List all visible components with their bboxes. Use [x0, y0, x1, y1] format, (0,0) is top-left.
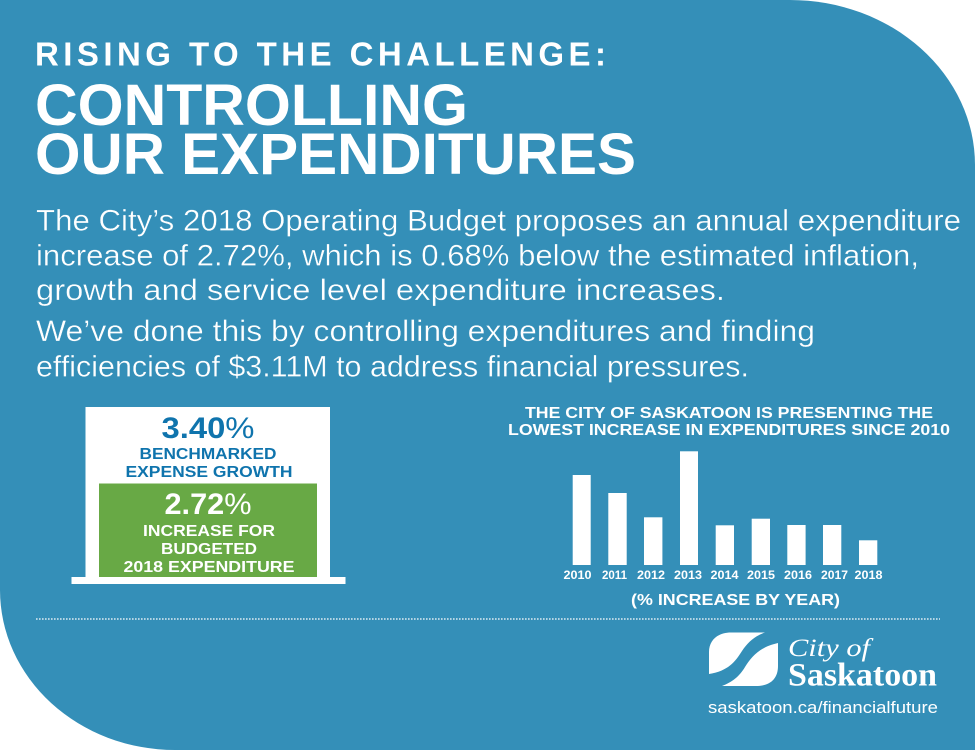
logo wordmark: Saskatoon	[788, 658, 937, 694]
text block: efficiencies: We’ve done this by controlling expenditures and finding	[36, 315, 815, 348]
chart heading: LOWEST INCREASE IN EXPENDITURES SINCE 2010	[508, 422, 950, 439]
panel: expense comparison graphic	[72, 407, 346, 584]
benchmarked value: 3.40%	[162, 412, 254, 445]
year labels: 2014	[710, 568, 739, 582]
year labels	[564, 568, 883, 582]
text block: budget summary: The City’s 2018 Operating Budget proposes an annual expenditure	[36, 204, 961, 238]
budgeted label: BUDGETED	[161, 541, 257, 558]
year labels: 2017	[821, 568, 848, 582]
text block: efficiencies	[36, 315, 815, 384]
bar chart	[564, 451, 883, 582]
text block: budget summary: growth and service level expenditure increases.	[36, 274, 725, 307]
text block: budget summary	[36, 204, 961, 307]
icon: logo mark	[709, 632, 778, 686]
green budgeted bar	[99, 484, 317, 577]
text block: budget summary: increase of 2.72%, which is 0.68% below the estimated inflation,	[36, 240, 919, 272]
website url: saskatoon.ca/financialfuture	[708, 698, 938, 717]
year labels: 2011	[602, 568, 627, 582]
base line	[72, 577, 346, 584]
chart heading	[508, 405, 950, 439]
text block: efficiencies: efficiencies of $3.11M to address financial pressures.	[36, 350, 749, 384]
chart caption: (% INCREASE BY YEAR)	[631, 592, 840, 609]
year labels: 2012	[637, 568, 665, 582]
logo: City of Saskatoon	[709, 632, 937, 694]
year labels: 2016	[784, 568, 812, 582]
year labels: 2013	[674, 568, 702, 582]
budgeted label: INCREASE FOR	[143, 523, 275, 540]
benchmarked label	[126, 446, 292, 481]
logo wordmark: City of	[788, 635, 874, 662]
year labels: 2010	[564, 568, 592, 582]
year labels: 2018	[854, 568, 883, 582]
budgeted label	[124, 523, 294, 576]
benchmarked label: BENCHMARKED	[140, 446, 276, 463]
white outer bar	[86, 407, 330, 577]
benchmarked label: EXPENSE GROWTH	[126, 464, 292, 481]
budgeted label: 2018 EXPENDITURE	[124, 559, 294, 576]
heading: title: CONTROLLING	[35, 73, 468, 138]
heading: title: OUR EXPENDITURES	[35, 122, 636, 187]
budgeted value: 2.72%	[164, 488, 252, 521]
heading: kicker: RISING TO THE CHALLENGE:	[35, 36, 606, 72]
heading: title	[35, 73, 636, 187]
chart heading: THE CITY OF SASKATOON IS PRESENTING THE	[525, 405, 933, 422]
logo wordmark	[788, 635, 937, 694]
year labels: 2015	[747, 568, 775, 582]
